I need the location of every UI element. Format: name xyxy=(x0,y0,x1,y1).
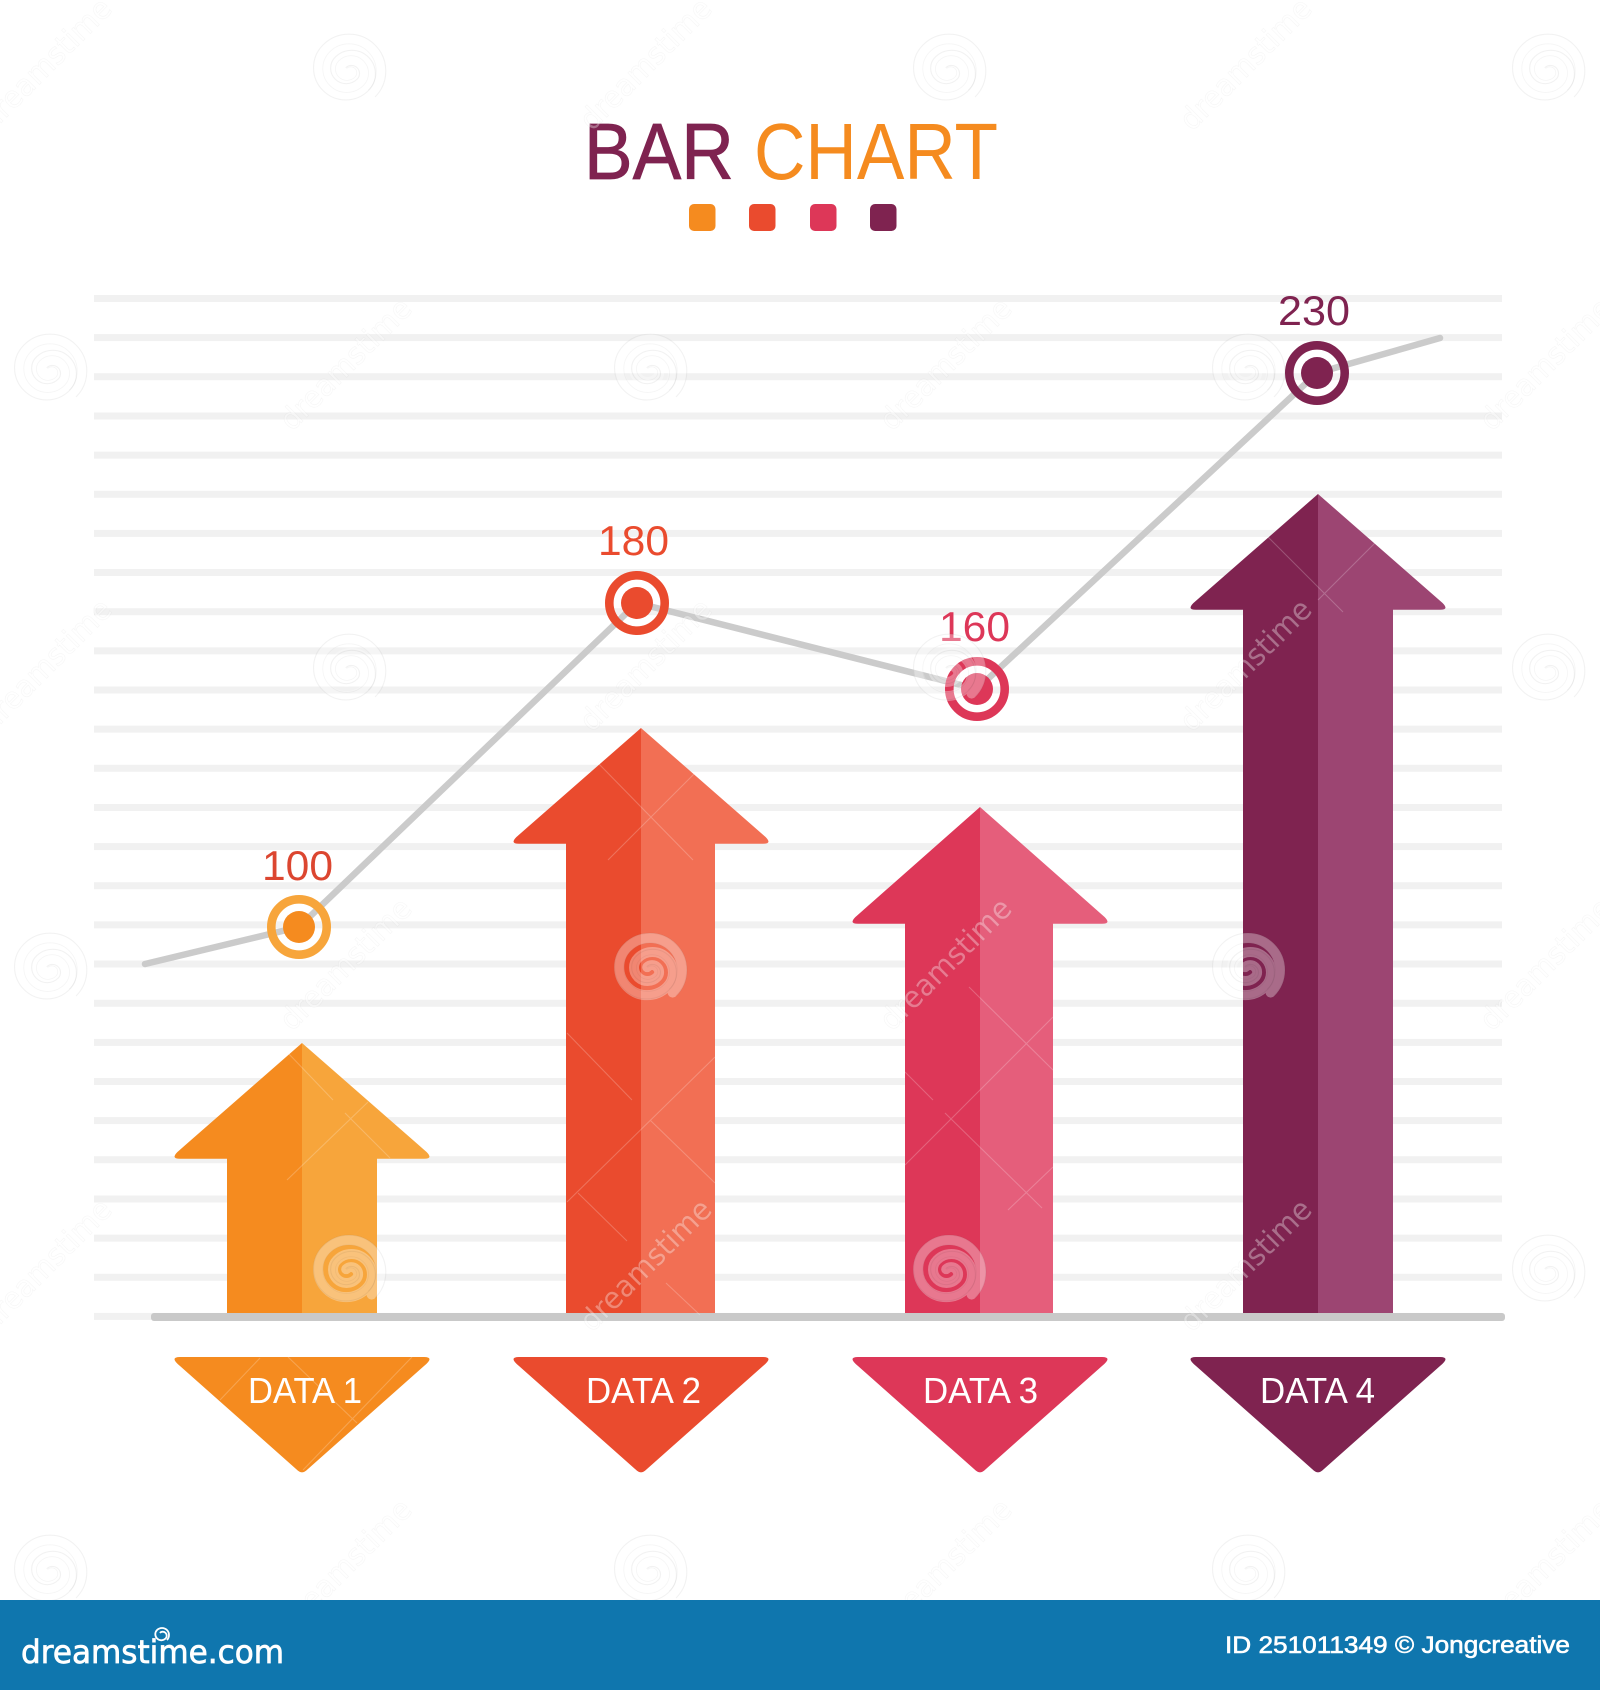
value label: 230: 230 xyxy=(1278,287,1350,334)
value label: 180: 180 xyxy=(598,517,669,564)
watermark text: dreamstime xyxy=(273,291,419,438)
watermark text: dreamstime xyxy=(273,891,419,1038)
category tag: data 4: DATA 4 xyxy=(1260,1370,1375,1411)
point marker: data 1 xyxy=(271,899,327,955)
category tag: data 2 xyxy=(514,1357,768,1472)
category tag: data 3: DATA 3 xyxy=(923,1370,1038,1411)
category tag: data 1 xyxy=(174,1357,430,1472)
category tag: data 1: DATA 1 xyxy=(248,1370,362,1411)
watermark text: dreamstime xyxy=(1173,1192,1319,1339)
arrow: data 1 xyxy=(174,1043,430,1313)
colour key squares xyxy=(689,204,896,231)
watermark text: dreamstime xyxy=(873,891,1019,1038)
watermark text: dreamstime xyxy=(873,1492,1019,1639)
category tag: data 4 xyxy=(1190,1357,1446,1472)
footer bar xyxy=(0,1600,1600,1690)
watermark text: dreamstime xyxy=(1173,592,1319,739)
point marker: data 4 xyxy=(1289,345,1345,401)
footer logo spiral xyxy=(153,1625,172,1644)
footer image id and credit: ID 251011349 © Jongcreative xyxy=(1225,1632,1570,1659)
value label: 100: 100 xyxy=(262,842,333,889)
title xyxy=(584,107,998,196)
value label: 160: 160 xyxy=(939,603,1010,650)
watermark text: dreamstime xyxy=(573,592,719,739)
trend line xyxy=(145,338,1440,964)
category tag: data 3 xyxy=(852,1357,1108,1472)
point marker: data 2 xyxy=(609,575,665,631)
footer brand name: dreamstime.com xyxy=(21,1633,284,1671)
arrow: data 4 xyxy=(1190,494,1446,1313)
title: CHART xyxy=(754,107,998,196)
axis baseline xyxy=(151,1313,1505,1321)
arrow: data 2 xyxy=(514,728,768,1313)
point marker: data 3 xyxy=(949,661,1005,717)
category tag: data 2: DATA 2 xyxy=(586,1370,701,1411)
arrow: data 3 xyxy=(852,807,1108,1313)
watermark text: dreamstime xyxy=(573,1192,719,1339)
watermark text: dreamstime xyxy=(273,1492,419,1639)
title: BAR xyxy=(584,107,734,196)
watermark text: dreamstime xyxy=(873,291,1019,438)
